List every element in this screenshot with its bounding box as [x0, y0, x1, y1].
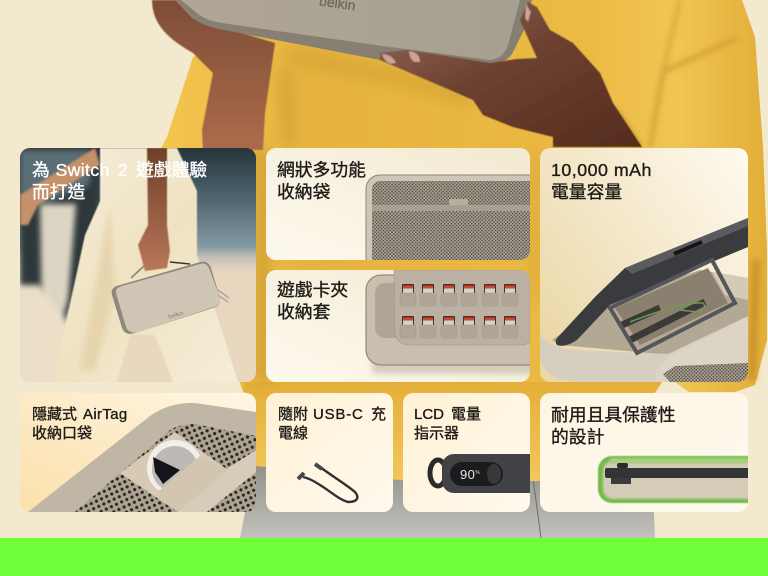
readout: %	[475, 470, 480, 476]
title: 收納袋	[277, 182, 331, 202]
title: USB-C	[313, 406, 364, 423]
lanyard ring	[430, 460, 446, 486]
tag black reflection	[153, 457, 180, 484]
trouser shading	[80, 205, 115, 370]
green highlight	[598, 456, 768, 503]
flap face	[394, 270, 530, 345]
title: 網狀多功能	[277, 160, 366, 180]
card background	[403, 393, 530, 512]
title: 耐用且具保護性	[551, 405, 675, 425]
logo: belkin	[168, 311, 184, 321]
tag ring	[147, 440, 203, 496]
button	[487, 464, 501, 484]
title: 隱藏式	[32, 406, 77, 423]
AirTag	[147, 440, 203, 496]
title: 遊戲體驗	[136, 160, 207, 180]
title: AirTag	[83, 406, 128, 423]
card background	[266, 270, 530, 382]
back wall light	[712, 272, 748, 300]
case edge	[112, 262, 220, 334]
panel: 10,000 mAh capacity	[540, 148, 748, 382]
left hand and arm	[152, 0, 275, 150]
panel: durable protective design	[540, 393, 768, 512]
title: LCD	[414, 406, 444, 423]
game cards	[400, 284, 416, 306]
grey trousers	[240, 460, 655, 538]
title: 電線	[278, 425, 308, 442]
cream gap at hem	[655, 382, 690, 393]
panel: built for Switch 2 gaming experience	[15, 148, 256, 390]
cream trousers	[53, 148, 238, 382]
flap	[394, 270, 530, 345]
power bank	[442, 454, 552, 493]
title: 為	[32, 160, 50, 180]
carrying case	[112, 262, 220, 334]
logo tab	[449, 199, 468, 205]
case surface	[176, 0, 532, 64]
console body	[556, 218, 748, 346]
console strip	[605, 468, 755, 478]
through-stand lining	[615, 268, 728, 345]
card background	[540, 393, 748, 512]
case outer	[366, 174, 530, 260]
shirt lower band	[243, 382, 662, 482]
title: 10,000 mAh	[551, 160, 652, 180]
right hand	[380, 2, 642, 147]
title: 收納套	[277, 302, 331, 322]
top green wash	[610, 458, 760, 464]
shirt shadows	[261, 55, 535, 382]
title: 隨附	[278, 406, 308, 423]
sleeve folds	[615, 0, 756, 380]
title: 電量容量	[551, 182, 622, 202]
display	[450, 462, 503, 486]
case front	[540, 316, 748, 382]
blue top left	[20, 150, 90, 205]
bag arm	[138, 148, 170, 271]
panel: mesh multifunction pouch	[266, 148, 530, 260]
case band	[28, 403, 256, 512]
strap	[372, 205, 532, 211]
raised arm and hand	[20, 148, 100, 225]
panel: game card sleeve	[266, 270, 556, 382]
strap	[177, 450, 256, 512]
tray interior	[552, 270, 748, 355]
case top panel	[181, 0, 520, 60]
panel: hidden AirTag pocket	[20, 393, 256, 512]
USB-C cable	[303, 467, 357, 502]
handle	[131, 266, 144, 278]
title: 的設計	[551, 427, 604, 447]
pale ground	[20, 280, 67, 380]
card background	[266, 393, 393, 512]
zip pull	[218, 290, 229, 302]
readout: 90	[460, 467, 475, 482]
case face	[116, 264, 220, 332]
title: 電量	[451, 406, 481, 423]
kickstand	[610, 260, 735, 353]
panel: USB-C cable included	[266, 393, 393, 512]
case body	[176, 0, 532, 64]
fingernails	[382, 4, 531, 64]
tray shadow	[370, 361, 530, 376]
title: 收納口袋	[32, 425, 92, 442]
yellow shirt	[160, 0, 767, 392]
title: 指示器	[414, 425, 459, 442]
title: Switch 2	[56, 160, 128, 180]
pocket front	[157, 456, 228, 512]
handle strap	[170, 262, 190, 264]
trouser crease	[533, 478, 541, 538]
mesh flap	[655, 317, 748, 382]
panel: LCD battery indicator	[403, 393, 552, 512]
mesh window	[663, 363, 748, 382]
blurred pale post	[40, 204, 76, 325]
tray inner	[375, 283, 396, 338]
case surface	[603, 461, 768, 499]
console buttons	[674, 242, 702, 254]
connector ends	[298, 464, 322, 479]
title: 而打造	[32, 182, 86, 202]
title: 遊戲卡夾	[277, 280, 348, 300]
tag face	[152, 446, 198, 492]
joystick	[617, 463, 628, 468]
trigger	[611, 478, 631, 484]
green cable	[630, 303, 705, 322]
title: 充	[371, 406, 386, 423]
dark left background	[20, 150, 100, 330]
pocket back	[120, 432, 228, 512]
card background	[20, 393, 256, 512]
green footer bar	[0, 538, 768, 576]
model holding the case	[152, 0, 767, 538]
mesh	[372, 181, 530, 260]
console top edge	[625, 218, 748, 274]
dark stored strips	[622, 302, 705, 340]
photo backdrop	[20, 148, 256, 382]
tray	[366, 274, 530, 366]
card background	[266, 148, 530, 260]
card background	[540, 148, 748, 382]
mesh	[75, 424, 256, 512]
